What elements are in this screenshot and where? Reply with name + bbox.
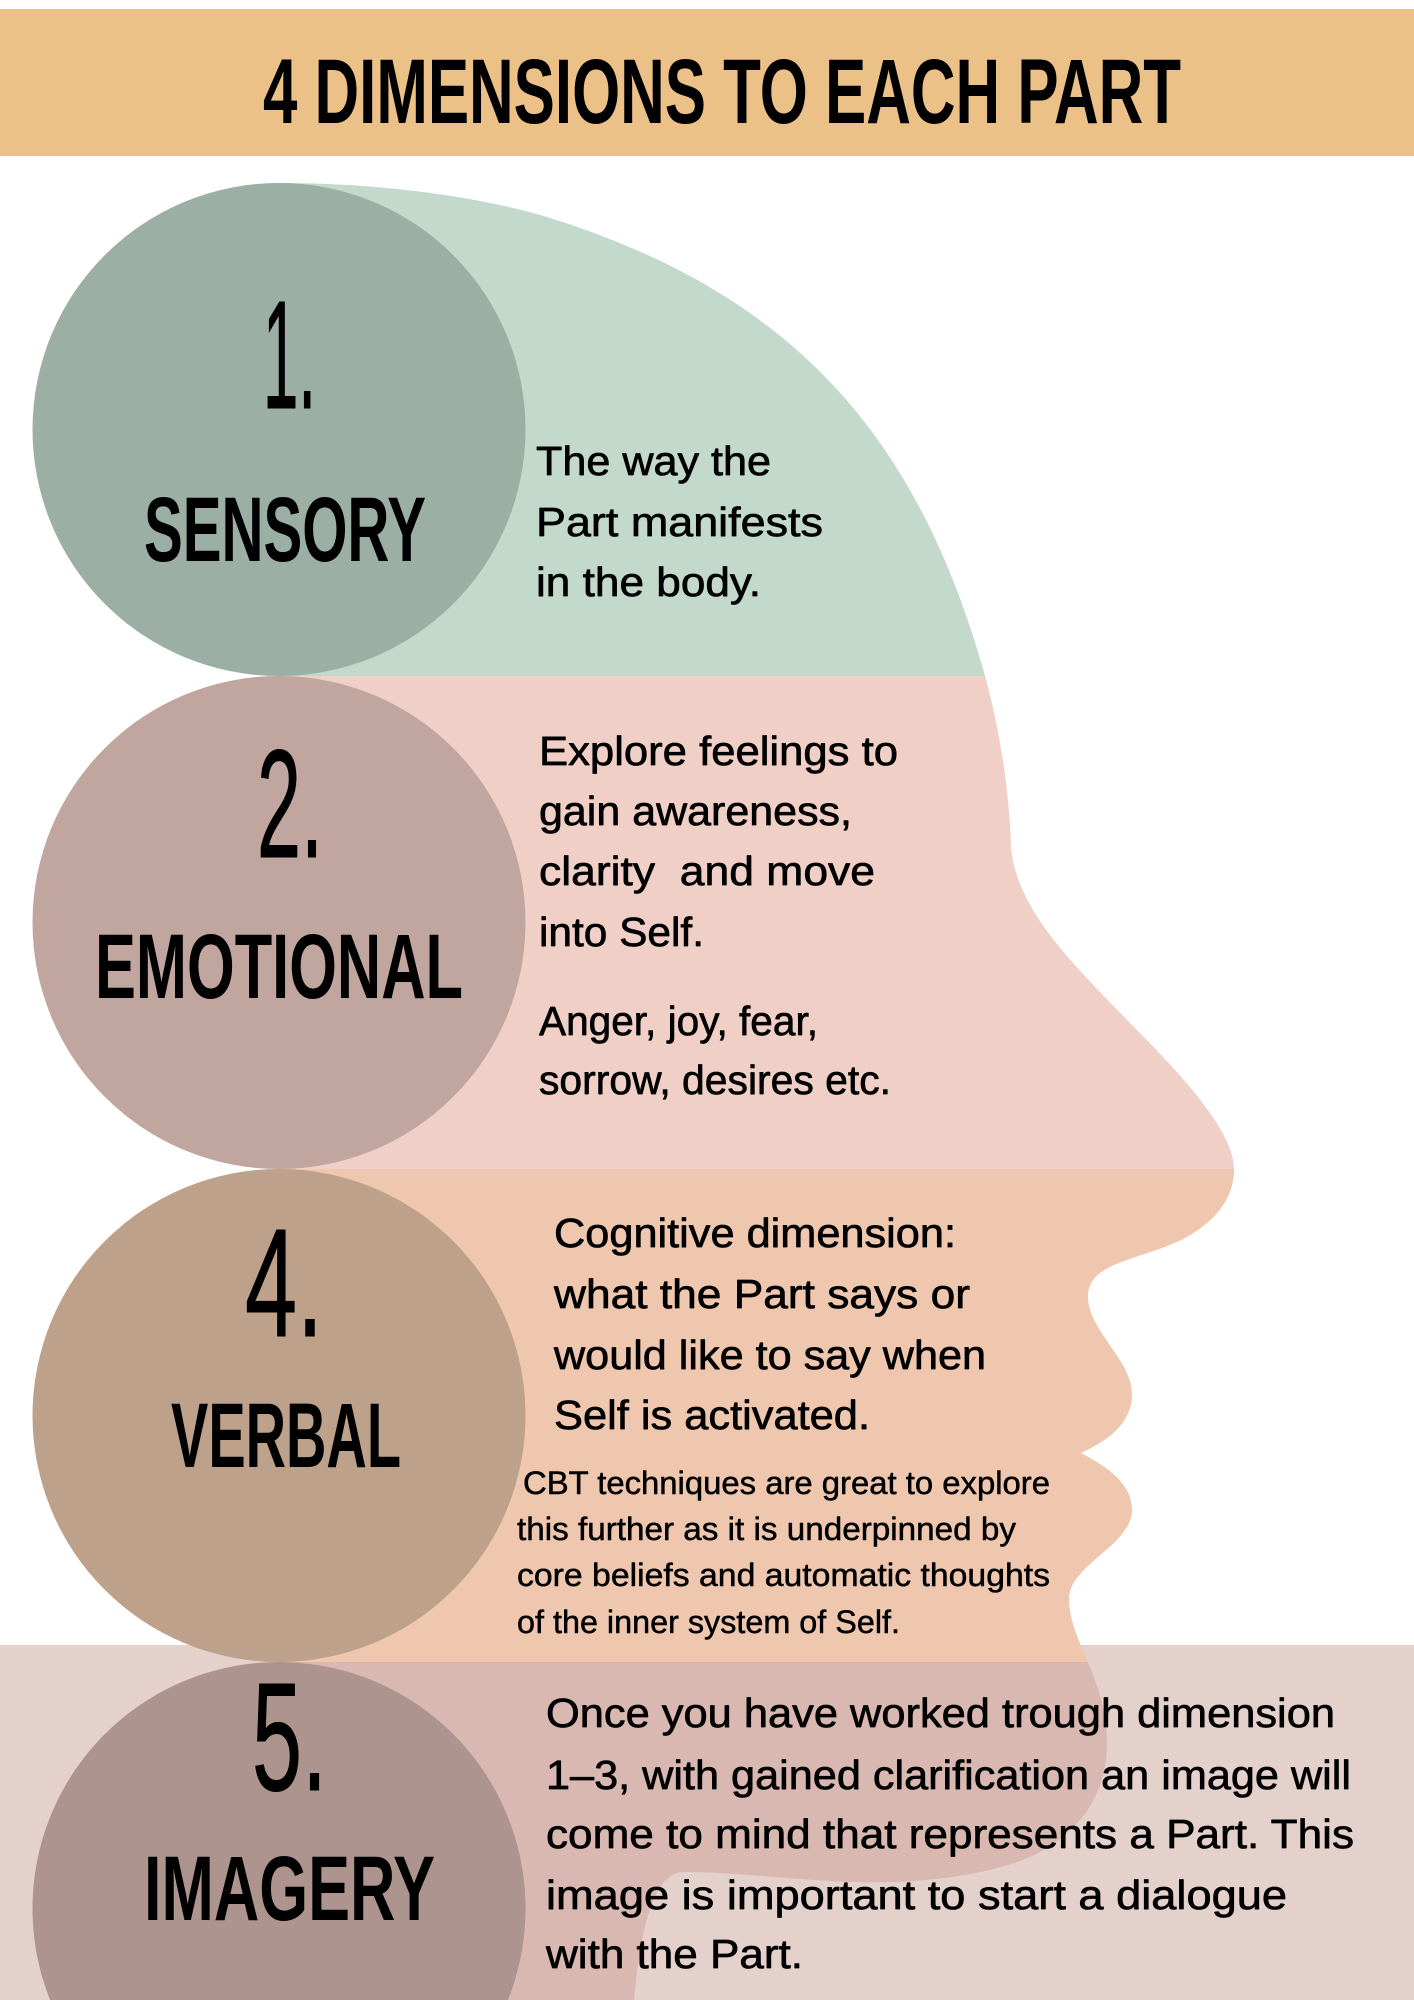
text: imagery description xyxy=(545,1690,1354,1977)
text: cbt note xyxy=(517,1465,1050,1640)
circle: verbal xyxy=(32,1169,526,1662)
circle: sensory xyxy=(32,183,526,676)
heading: sensory: SENSORY xyxy=(144,479,426,581)
text: emotional description: clarity and move xyxy=(539,848,875,894)
text: imagery description: come to mind that represents a Part. This xyxy=(546,1811,1354,1857)
text: sensory description: The way the xyxy=(536,438,771,484)
text: cbt note: of the inner system of Self. xyxy=(517,1604,900,1640)
heading: emotional: EMOTIONAL xyxy=(95,916,463,1018)
heading: verbal: VERBAL xyxy=(171,1385,401,1487)
text: sensory description: Part manifests xyxy=(536,499,823,545)
panel: imagery xyxy=(32,1651,1354,2000)
text: verbal description: Cognitive dimension: xyxy=(554,1210,956,1256)
text: imagery description: 1–3, with gained clarification an image will xyxy=(546,1752,1351,1798)
text: emotion examples xyxy=(539,998,891,1103)
text: emotional description xyxy=(539,728,898,955)
text: cbt note: CBT techniques are great to explore xyxy=(523,1465,1050,1501)
circle: imagery xyxy=(32,1662,526,2000)
text: verbal description: what the Part says or xyxy=(553,1271,970,1317)
panel: verbal xyxy=(32,1169,1050,1662)
circle: emotional xyxy=(32,676,526,1169)
text: emotional description: gain awareness, xyxy=(539,788,852,834)
text: emotional description: into Self. xyxy=(539,909,704,955)
number 5: 5. xyxy=(252,1651,327,1823)
text: verbal description xyxy=(553,1210,986,1438)
text: verbal description: would like to say when xyxy=(553,1332,986,1378)
number 4: 4. xyxy=(245,1197,323,1369)
text: imagery description: image is important to start a dialogue xyxy=(546,1872,1287,1918)
text: emotion examples: Anger, joy, fear, xyxy=(539,998,818,1044)
text: imagery description: with the Part. xyxy=(545,1931,803,1977)
bottom background band xyxy=(0,1645,1414,2000)
text: emotional description: Explore feelings to xyxy=(539,728,898,774)
heading: imagery: IMAGERY xyxy=(144,1838,435,1940)
text: imagery description: Once you have worked trough dimension xyxy=(546,1690,1335,1736)
panel: sensory xyxy=(32,183,823,676)
text: cbt note: this further as it is underpinned by xyxy=(517,1511,1016,1547)
text: sensory description: in the body. xyxy=(536,559,761,605)
panel: emotional xyxy=(32,676,898,1169)
text: emotion examples: sorrow, desires etc. xyxy=(539,1057,891,1103)
head silhouette xyxy=(280,183,1234,2000)
text: verbal description: Self is activated. xyxy=(554,1392,870,1438)
text: cbt note: core beliefs and automatic thoughts xyxy=(517,1557,1050,1593)
number 2: 2. xyxy=(257,718,323,890)
panel: sensory: 1. xyxy=(263,269,316,441)
text: sensory description xyxy=(536,438,823,605)
title banner xyxy=(0,9,1414,156)
